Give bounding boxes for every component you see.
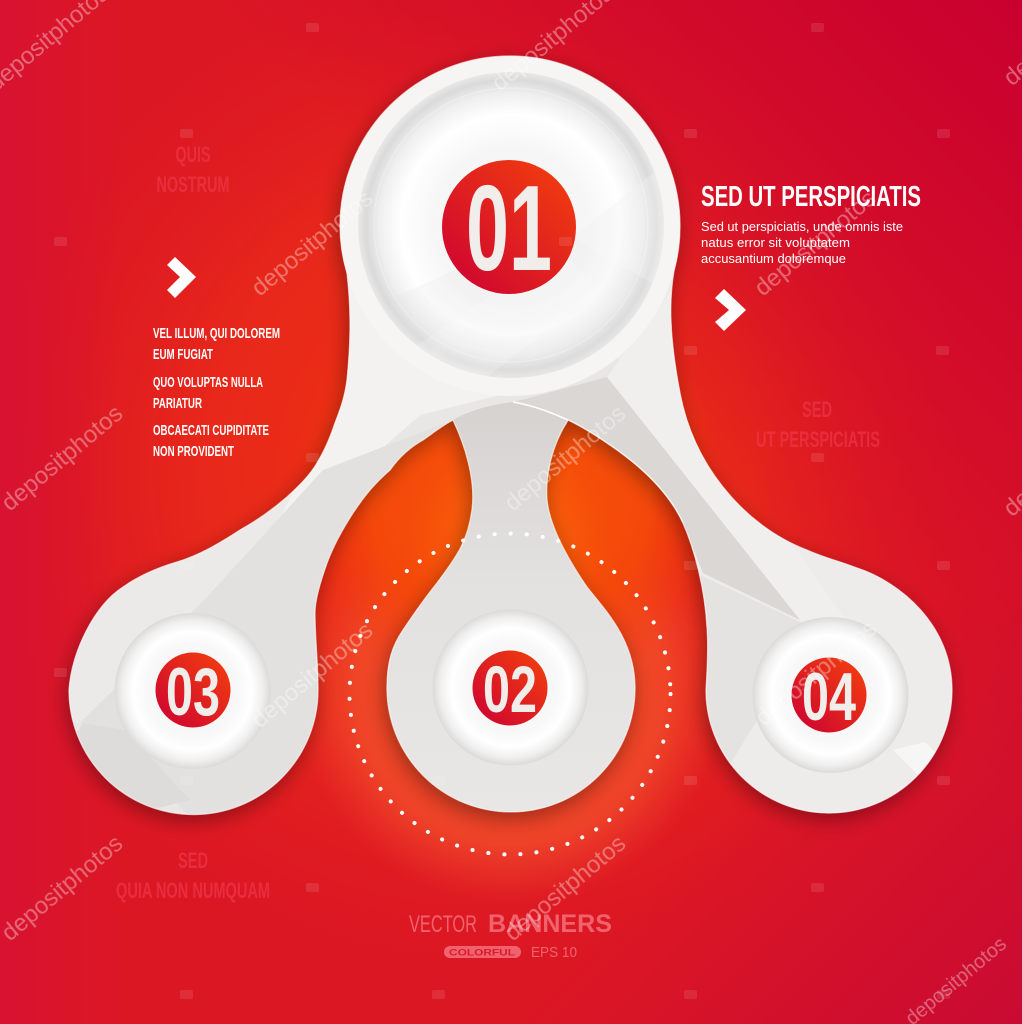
watermarks: depositphotos [0,830,128,947]
right heading: SED UT PERSPICIATIS [701,181,921,213]
number badge 01: 01 [466,160,552,296]
left list: QUO VOLUPTAS NULLA [153,374,263,391]
watermarks: depositphotos [499,830,631,947]
footer: vector banners: COLORFUL [449,948,516,958]
icon: arrow left list [167,257,196,298]
facets [60,226,960,820]
watermarks: depositphotos [750,615,882,732]
watermarks: depositphotos [499,400,631,517]
dotted ring [350,534,670,854]
disc 02 [432,610,588,766]
left list: VEL ILLUM, QUI DOLOREM [153,325,280,342]
left list: EUM FUGIAT [153,346,213,363]
disc 02: 02 [483,652,537,726]
faint labels: SED [802,397,832,422]
disc 04: 04 [802,659,856,735]
footer: vector banners [409,910,612,961]
right text block: Sed ut perspiciatis, unde omnis iste [701,220,903,234]
faint labels: QUIS [176,142,210,167]
left list: NON PROVIDENT [153,443,234,460]
right text block: accusantium doloremque [701,252,846,266]
footer: vector banners: VECTOR [409,911,477,938]
icon: arrow right [715,289,746,331]
left list: OBCAECATI CUPIDITATE [153,422,269,439]
glow behind circle 02 [295,275,725,905]
disc 04 [752,617,908,773]
disc 03 [114,613,270,769]
faint labels: UT PERSPICIATIS [756,427,880,452]
faint labels: NOSTRUM [156,172,230,197]
right text block: natus error sit voluptatem [701,236,850,250]
faint labels [116,142,880,903]
disc 03: 03 [166,654,220,730]
footer: vector banners: BANNERS [488,910,612,938]
watermarks: depositphotos [0,400,128,517]
white connector shape [60,56,960,820]
watermarks: depositphotos [749,185,881,302]
faint labels: SED [178,848,208,873]
main disc 01 [340,56,680,400]
watermarks: depositphotos [246,185,378,302]
footer: vector banners: EPS 10 [531,944,577,961]
right text block [701,220,903,266]
left list: PARIATUR [153,395,202,412]
number badge 01 [442,160,576,296]
watermarks: depositphotos [246,617,378,734]
left list [153,325,280,460]
faint labels: QUIA NON NUMQUAM [116,878,270,903]
